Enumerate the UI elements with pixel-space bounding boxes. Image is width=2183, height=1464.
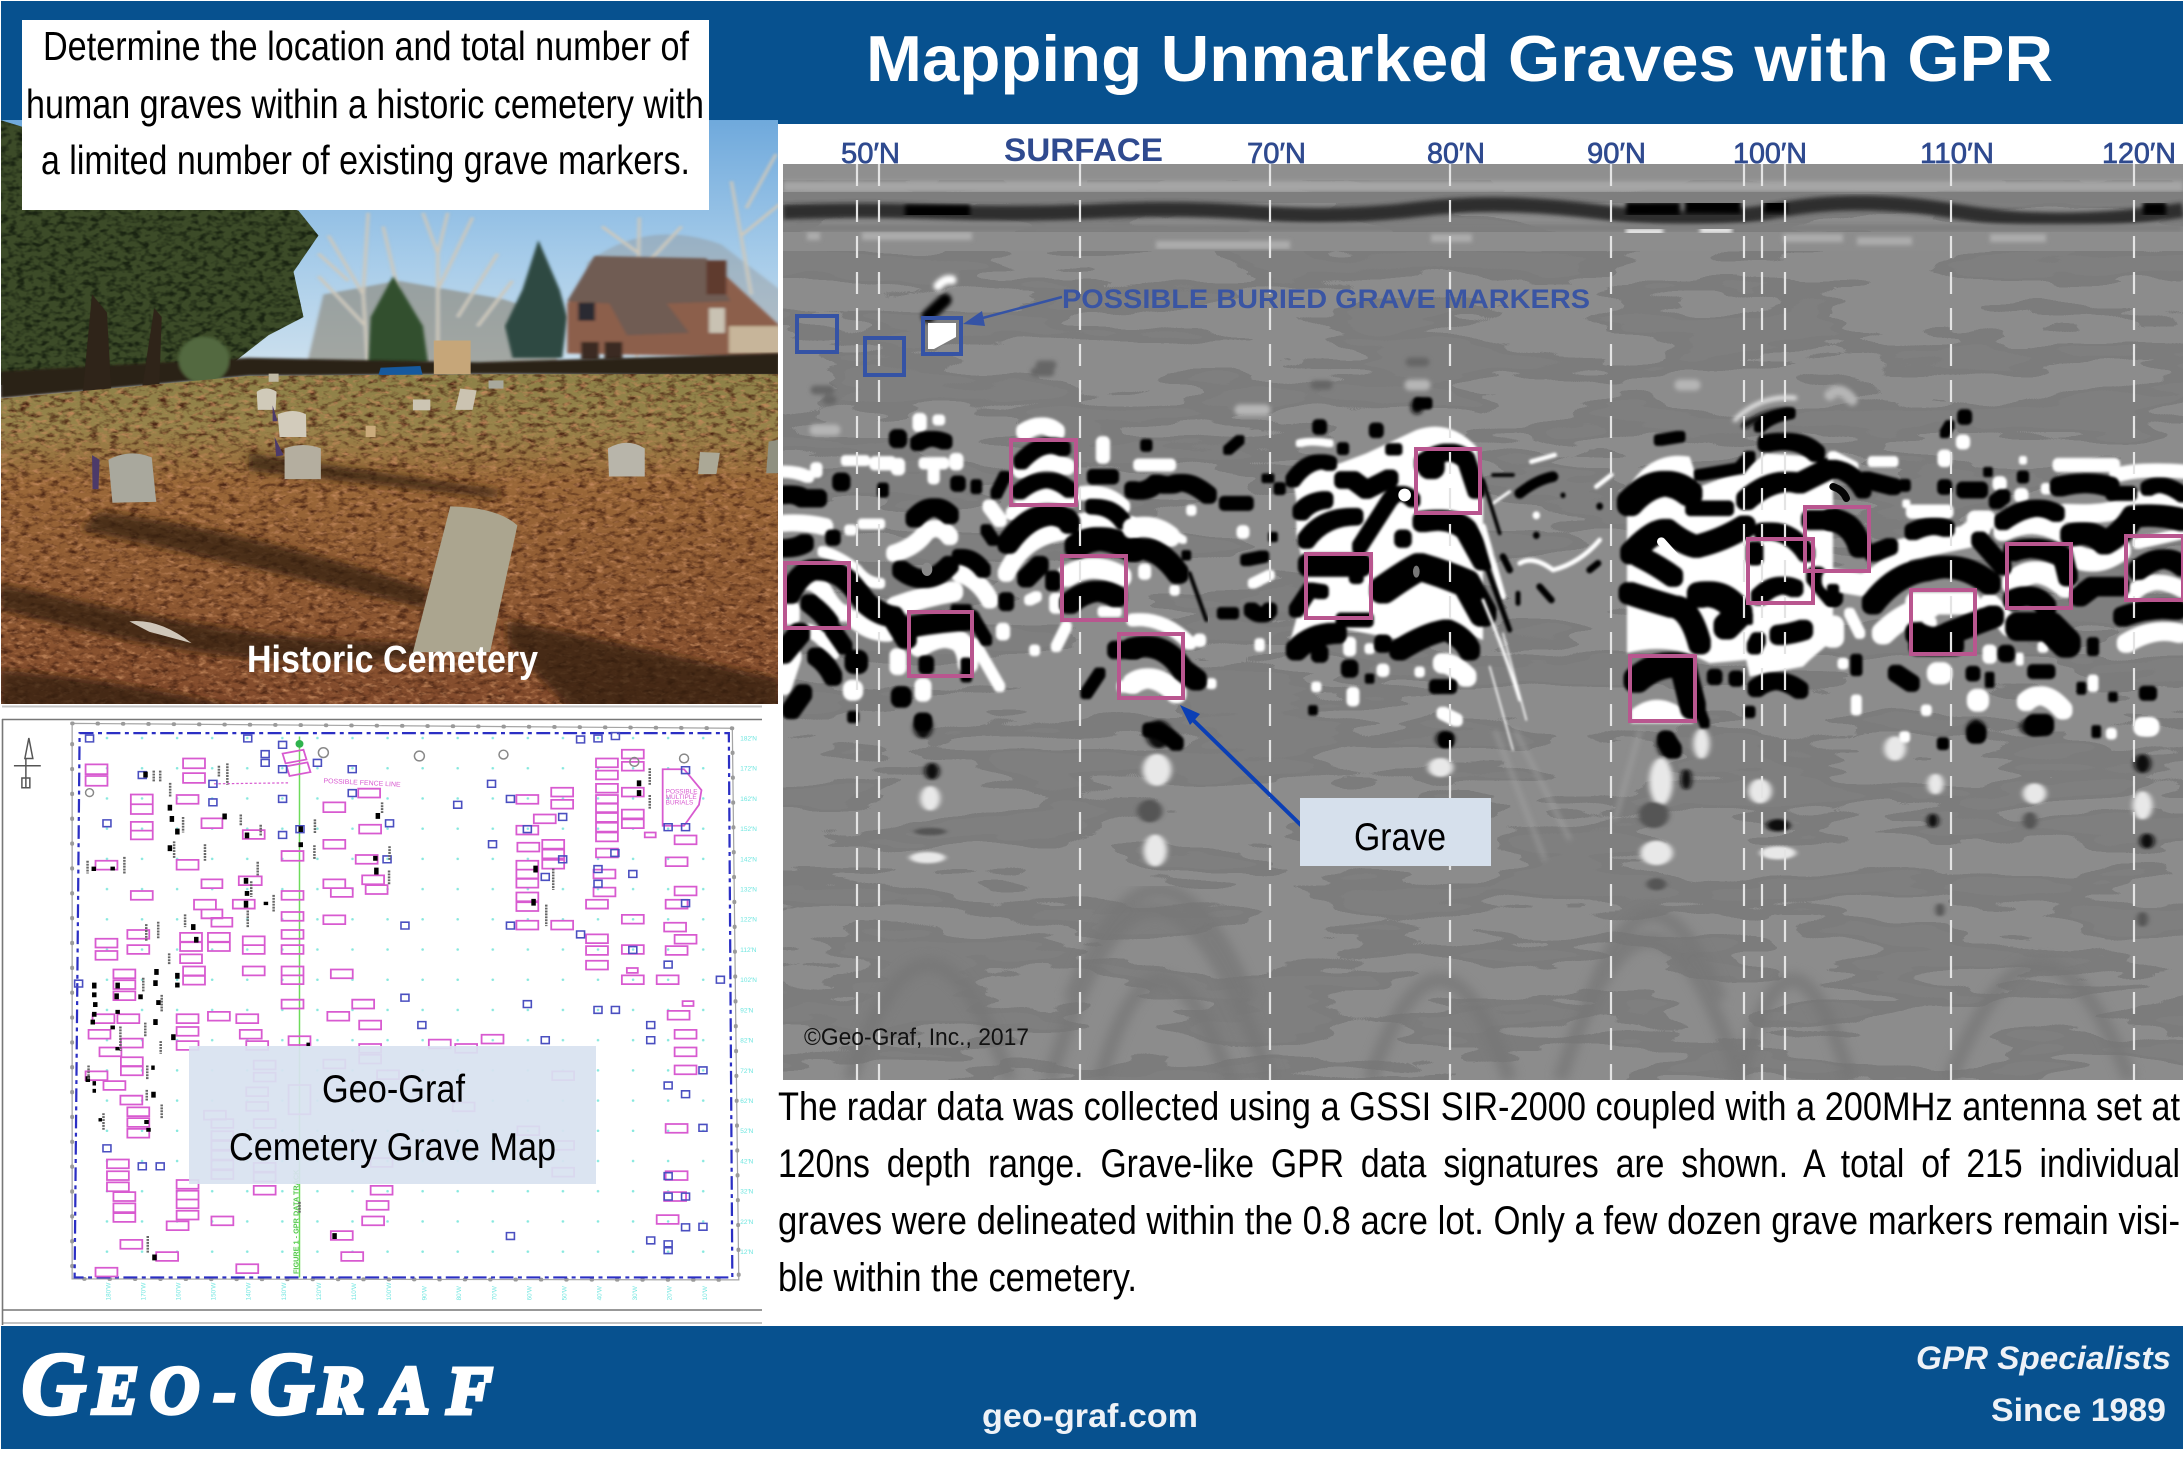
panel: grave map [2, 706, 762, 1325]
tagline [1916, 1340, 2171, 1428]
shed [434, 341, 471, 374]
background bare trees [308, 154, 780, 376]
blue tarp [378, 366, 423, 376]
map gridline labels east: 132'N [740, 887, 757, 893]
map gridline labels east: 102'N [740, 977, 757, 984]
interpreted graves [86, 750, 701, 1276]
station labels: 110′N [1920, 138, 1994, 170]
map gridline labels south: 120'W [316, 1282, 323, 1300]
map gridline labels east: 162'N [740, 796, 757, 803]
map gridline labels south: 90'W [421, 1285, 428, 1300]
radar background [783, 164, 2183, 1080]
tagline: Since 1989 [1991, 1392, 2166, 1428]
possible burials label: MULTIPLE [666, 794, 697, 801]
fence line [214, 782, 289, 785]
station labels: 70′N [1247, 138, 1306, 170]
objective text box [22, 20, 709, 210]
objective text box: a limited number of existing grave markers. [41, 137, 690, 183]
description text [778, 1085, 2180, 1300]
fence line label: POSSIBLE FENCE LINE [323, 778, 401, 789]
fence and hedge [0, 353, 780, 399]
radar signal bands tile 1 [783, 420, 1133, 722]
logo: Geo-Graf: E [92, 1352, 138, 1428]
gravestones [92, 374, 780, 652]
map gridline labels south: 30'W [632, 1285, 639, 1300]
radar signal bands tile 2 [1133, 403, 1483, 743]
survey station lines [857, 164, 2134, 1080]
station labels: 120′N [2102, 138, 2176, 170]
property boundary [72, 723, 739, 1280]
map gridline labels south: 50'W [562, 1285, 569, 1300]
objective text box: Determine the location and total number of [43, 23, 689, 69]
panel: cemetery photo [0, 120, 780, 710]
map gridline labels south: 20'W [667, 1285, 674, 1300]
map gridline labels south: 10'W [702, 1285, 709, 1300]
logo: Geo-Graf: G [22, 1336, 86, 1433]
map gridline labels east [740, 735, 757, 1256]
map gridline labels east: 62'N [740, 1098, 754, 1105]
station labels: 90′N [1587, 138, 1646, 170]
map gridline labels south: 100'W [386, 1282, 393, 1300]
logo: Geo-Graf: A [380, 1352, 429, 1428]
lower hyperbola tails [910, 716, 2158, 927]
long tree shadows [0, 453, 780, 710]
panel: GPR profile [783, 132, 2183, 1080]
map gridline labels east: 182'N [740, 735, 757, 742]
map caption: Cemetery Grave Map [229, 1126, 556, 1169]
faint hyperbola arcs [850, 890, 2130, 1080]
track origin dot [296, 740, 303, 748]
arrow: buried markers [963, 297, 1062, 326]
surface label: SURFACE [1004, 132, 1163, 168]
shrub [178, 337, 230, 384]
map gridline labels east: 42'N [740, 1158, 754, 1165]
objective text box: human graves within a historic cemetery with [26, 81, 704, 127]
upper faint signatures [815, 280, 1852, 430]
footer band [1, 1326, 2183, 1449]
map gridline labels south: 40'W [596, 1285, 603, 1300]
map gridline labels east: 12'N [740, 1249, 754, 1256]
possible buried markers label: POSSIBLE BURIED GRAVE MARKERS [1062, 284, 1590, 314]
map gridline labels south: 60'W [526, 1285, 533, 1300]
buried marker boxes [797, 316, 961, 375]
grave callout [1300, 798, 1491, 866]
evergreen trees [0, 120, 318, 385]
logo: Geo-Graf: F [446, 1352, 492, 1428]
map gridline labels south [105, 1282, 709, 1300]
map gridline labels east: 32'N [740, 1189, 754, 1196]
website: geo-graf.com [982, 1397, 1198, 1434]
map gridline labels east: 92'N [740, 1007, 754, 1014]
title: Mapping Unmarked Graves with GPR [866, 22, 2053, 95]
station labels: 100′N [1733, 138, 1807, 170]
logo: Geo-Graf: O [150, 1352, 199, 1428]
photo caption: Historic Cemetery [247, 639, 538, 681]
station labels: 50′N [841, 138, 900, 170]
tagline: GPR Specialists [1916, 1340, 2171, 1376]
grave signature boxes [785, 440, 2183, 721]
north arrow [14, 738, 41, 788]
photo sky [0, 120, 780, 392]
buried markers [75, 733, 724, 1254]
marker name labels [88, 763, 650, 1254]
80N tail lines [1495, 730, 1640, 860]
map gridline labels south: 150'W [210, 1282, 217, 1300]
tree trunks [82, 295, 162, 391]
map gridline labels east: 112'N [740, 947, 757, 954]
radar signal bands tile 4 [1833, 417, 2183, 744]
surface reflection bands [783, 164, 2183, 251]
map gridline labels south: 70'W [491, 1285, 499, 1300]
map gridline labels east: 72'N [740, 1068, 754, 1075]
map gridline labels east: 152'N [740, 826, 757, 833]
map survey grid dots [85, 734, 731, 1270]
existing grave markers [86, 772, 641, 1260]
house [567, 256, 780, 360]
possible burials label: POSSIBLE [666, 789, 698, 796]
possible burials label: BURIALS [666, 799, 693, 806]
map gridline labels south: 130'W [281, 1282, 288, 1300]
map gridline labels east: 52'N [740, 1128, 754, 1135]
track label: FIGURE 1 - GPR DATA TRACK [291, 1169, 301, 1274]
map gridline labels east: 22'N [740, 1219, 754, 1226]
survey monuments [86, 748, 689, 796]
map caption: Geo-Graf [322, 1068, 465, 1111]
survey boundary [75, 733, 732, 1277]
small pine [505, 240, 567, 358]
map gridline labels south: 80'W [456, 1285, 463, 1300]
map gridline labels south: 170'W [140, 1282, 147, 1300]
GPR data track [298, 737, 301, 1277]
center pine [368, 276, 428, 367]
map caption [229, 1068, 556, 1169]
logo: Geo-Graf: G [250, 1336, 314, 1433]
description text: ble within the cemetery. [778, 1256, 1137, 1300]
station labels [841, 138, 2176, 170]
header band [1, 1, 2183, 124]
map gridline labels south: 110'W [351, 1282, 358, 1300]
arrow: grave [1180, 705, 1308, 832]
copyright: ©Geo-Graf, Inc., 2017 [804, 1024, 1029, 1051]
map gridline labels south: 140'W [246, 1282, 253, 1300]
map gridline labels south: 160'W [176, 1282, 183, 1300]
map gridline labels east: 172'N [740, 766, 757, 773]
station labels: 80′N [1427, 138, 1485, 170]
logo: Geo-Graf: - [214, 1356, 235, 1427]
map caption box [189, 1046, 596, 1184]
map gridline labels east: 142'N [740, 856, 757, 863]
logo: Geo-Graf: R [318, 1352, 364, 1428]
map gridline labels east: 82'N [740, 1038, 754, 1045]
ground [0, 374, 780, 710]
grave callout: Grave [1354, 816, 1446, 859]
map gridline labels east: 122'N [740, 917, 757, 924]
buried marker highlight [928, 323, 956, 349]
radar signal bands tile 3 [1483, 413, 1833, 750]
map gridline labels south: 180'W [105, 1282, 112, 1300]
fence posts [72, 723, 739, 1280]
